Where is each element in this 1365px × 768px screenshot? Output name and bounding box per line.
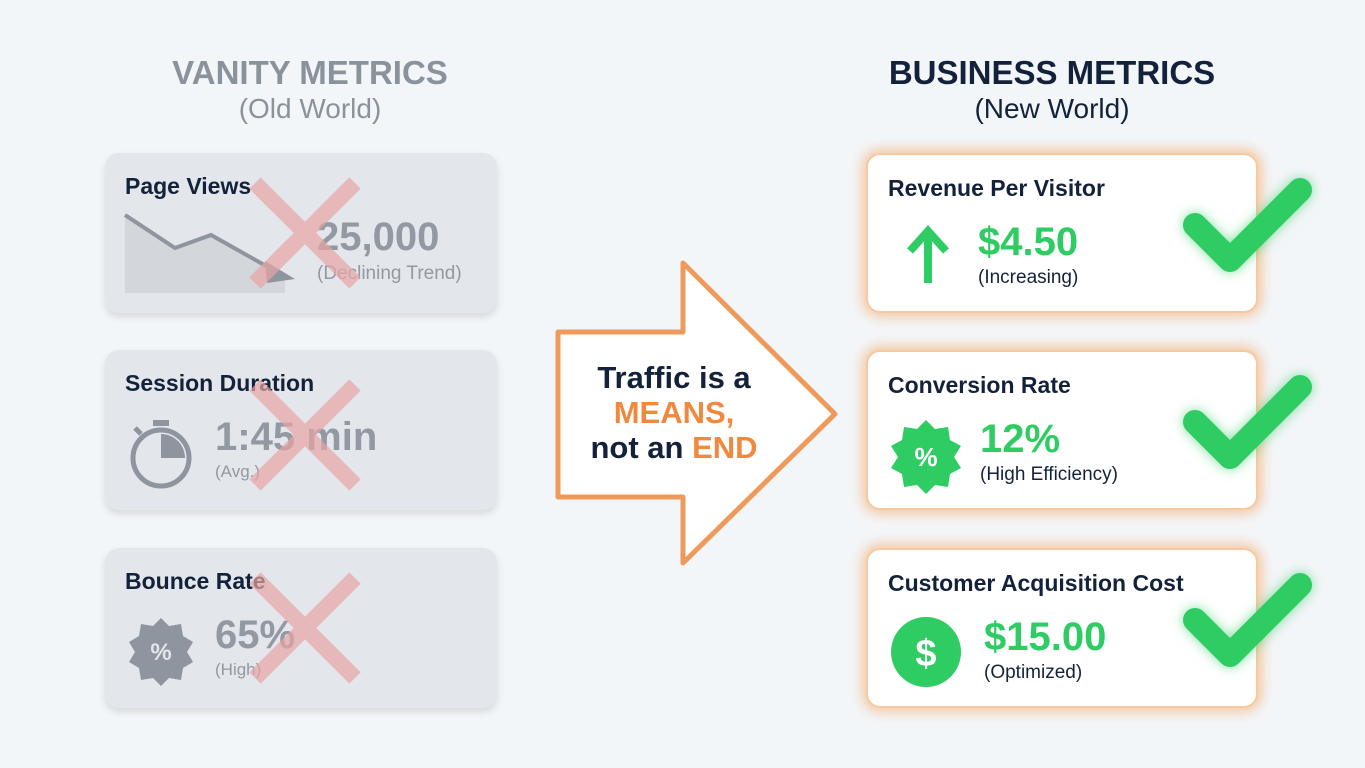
icon: red x xyxy=(250,380,360,490)
panel: revenue per visitor: (Increasing) xyxy=(978,267,1078,288)
panel: customer acquisition cost xyxy=(866,548,1258,708)
panel: conversion rate: Conversion Rate xyxy=(888,372,1071,398)
chart: declining line xyxy=(124,214,295,293)
icon: stopwatch xyxy=(130,420,192,488)
panel: page views: Page Views xyxy=(125,173,251,199)
panel: conversion rate xyxy=(866,350,1258,510)
panel: customer acquisition cost: Customer Acquisition Cost xyxy=(888,570,1184,596)
icon: dollar coin: $ xyxy=(915,633,937,675)
title: vanity metrics: (Old World) xyxy=(239,93,381,124)
panel: conversion rate: (High Efficiency) xyxy=(980,464,1118,485)
title: business metrics xyxy=(889,54,1215,124)
icon: percent badge green: % xyxy=(914,442,938,472)
panel: bounce rate: (High) xyxy=(215,660,261,679)
panel: customer acquisition cost: $15.00 xyxy=(984,615,1106,659)
arrow: traffic is a means xyxy=(556,260,838,566)
panel: session duration: Session Duration xyxy=(125,370,314,396)
panel: revenue per visitor: Revenue Per Visitor xyxy=(888,175,1105,201)
title: vanity metrics xyxy=(172,54,448,124)
panel: page views xyxy=(105,153,497,313)
panel: conversion rate: 12% xyxy=(980,417,1060,461)
icon: up arrow xyxy=(907,225,949,283)
panel: bounce rate: 65% xyxy=(215,613,295,657)
text: arrow message: MEANS, xyxy=(614,395,734,430)
title: business metrics: BUSINESS METRICS xyxy=(889,54,1215,91)
icon: red x xyxy=(249,572,360,684)
panel: page views: 25,000 xyxy=(317,215,439,259)
panel: session duration: (Avg.) xyxy=(215,462,260,481)
panel: bounce rate xyxy=(105,548,497,708)
panel: session duration xyxy=(105,350,497,510)
icon: percent badge green xyxy=(891,420,961,494)
title: business metrics: (New World) xyxy=(974,93,1130,124)
icon: red x xyxy=(249,178,360,288)
panel: revenue per visitor: $4.50 xyxy=(978,220,1078,264)
panel: revenue per visitor xyxy=(866,153,1258,313)
icon: percent badge xyxy=(129,618,193,686)
panel: customer acquisition cost: (Optimized) xyxy=(984,662,1082,683)
title: vanity metrics: VANITY METRICS xyxy=(172,54,448,91)
text: arrow message: Traffic is a xyxy=(597,360,751,395)
icons: green checkmarks xyxy=(1176,170,1320,674)
panel: page views: (Declining Trend) xyxy=(317,263,462,284)
panel: bounce rate: Bounce Rate xyxy=(125,568,266,594)
panel: session duration: 1:45 min xyxy=(215,415,377,459)
icon: dollar coin xyxy=(891,617,961,687)
icon: percent badge: % xyxy=(150,639,172,666)
text: arrow message: not an END xyxy=(590,430,758,465)
text: arrow message xyxy=(590,360,758,465)
